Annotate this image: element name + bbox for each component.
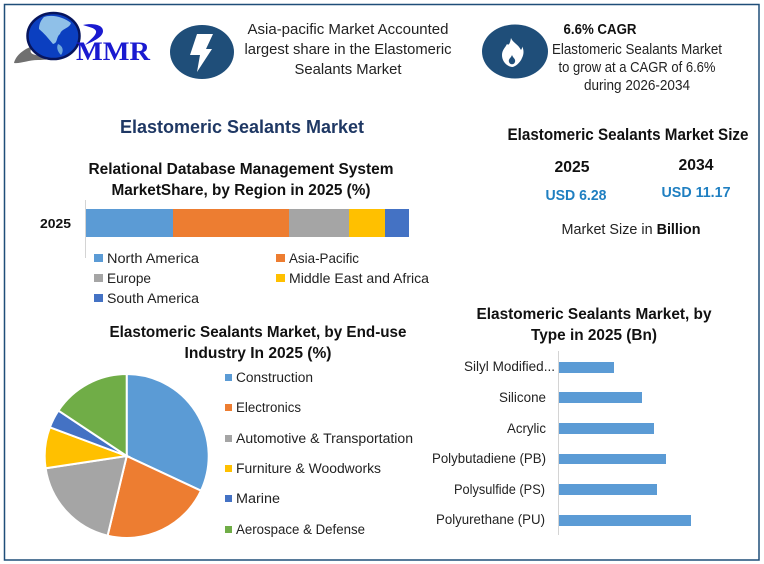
horizontal bar chart: Silyl Modified... <box>464 358 555 374</box>
text block: Asia-Pacific share <box>244 21 452 78</box>
text block: CAGR: 6.6% CAGR <box>564 22 637 38</box>
horizontal bar chart <box>432 351 691 535</box>
stat: 2025: 2025 <box>554 159 590 176</box>
text block: CAGR: to grow at a CAGR of 6.6% <box>558 60 716 76</box>
heading: pie chart: Elastomeric Sealants Market, by End-use <box>110 324 407 341</box>
horizontal bar chart: Polybutadiene (PB) <box>432 450 546 466</box>
heading: type chart: Type in 2025 (Bn) <box>531 327 657 344</box>
legend: industries: Electronics <box>236 400 301 415</box>
stat: 2034: USD 11.17 <box>662 184 730 201</box>
legend: industries: Construction <box>236 370 313 385</box>
legend: industries <box>225 370 413 537</box>
horizontal bar chart: Acrylic <box>507 420 546 436</box>
heading: pie chart: Industry In 2025 (%) <box>184 345 332 362</box>
stat: 2025: USD 6.28 <box>546 187 606 204</box>
stat: 2025 <box>546 159 606 204</box>
heading: regional chart: MarketShare, by Region in 2025 (%) <box>112 182 370 199</box>
horizontal bar chart: Silicone <box>499 389 546 405</box>
text block: Asia-Pacific share: largest share in the Elastomeric <box>244 41 452 58</box>
pie chart <box>45 374 209 538</box>
panel: type bar chart <box>432 306 712 535</box>
panel: regional share chart <box>40 161 429 306</box>
legend: regions: North America <box>107 250 199 266</box>
text block: Asia-Pacific share: Sealants Market <box>294 61 402 78</box>
icon: lightning bolt <box>170 25 234 79</box>
heading: regional chart: Relational Database Management System <box>88 161 394 178</box>
stacked bar <box>40 200 409 258</box>
legend: regions: Middle East and Africa <box>289 270 429 286</box>
text block: Asia-Pacific share: Asia-pacific Market Accounted <box>248 21 448 38</box>
legend: industries: Aerospace & Defense <box>236 522 365 537</box>
legend: regions: Asia-Pacific <box>289 250 359 266</box>
text block: CAGR <box>552 22 722 94</box>
stacked bar: 2025 <box>40 216 71 231</box>
logo: MMR <box>14 12 150 66</box>
legend: industries: Automotive & Transportation <box>236 431 413 446</box>
panel: end-use pie chart <box>45 324 413 538</box>
legend: regions: South America <box>107 290 199 306</box>
text block: CAGR: Elastomeric Sealants Market <box>552 42 722 58</box>
icon: flame <box>482 24 548 78</box>
stat: 2034 <box>662 157 730 201</box>
legend: regions <box>94 250 429 306</box>
legend: industries: Furniture & Woodworks <box>236 461 381 476</box>
horizontal bar chart: Polysulfide (PS) <box>454 481 545 497</box>
stat: 2034: 2034 <box>678 157 714 174</box>
heading: pie chart <box>110 324 407 362</box>
title: Elastomeric Sealants Market <box>120 117 364 137</box>
panel: market size <box>508 126 748 238</box>
heading: market size: Elastomeric Sealants Market Size <box>508 126 748 144</box>
heading: regional chart <box>88 161 394 199</box>
horizontal bar chart: Polyurethane (PU) <box>436 511 545 527</box>
legend: regions: Europe <box>107 270 151 286</box>
text block: CAGR: during 2026-2034 <box>584 78 690 94</box>
logo: MMR: MMR <box>76 37 150 66</box>
heading: type chart: Elastomeric Sealants Market, by <box>476 306 712 323</box>
note: units: Market Size in Billion <box>562 222 700 238</box>
heading: type chart <box>476 306 712 344</box>
legend: industries: Marine <box>236 491 280 506</box>
